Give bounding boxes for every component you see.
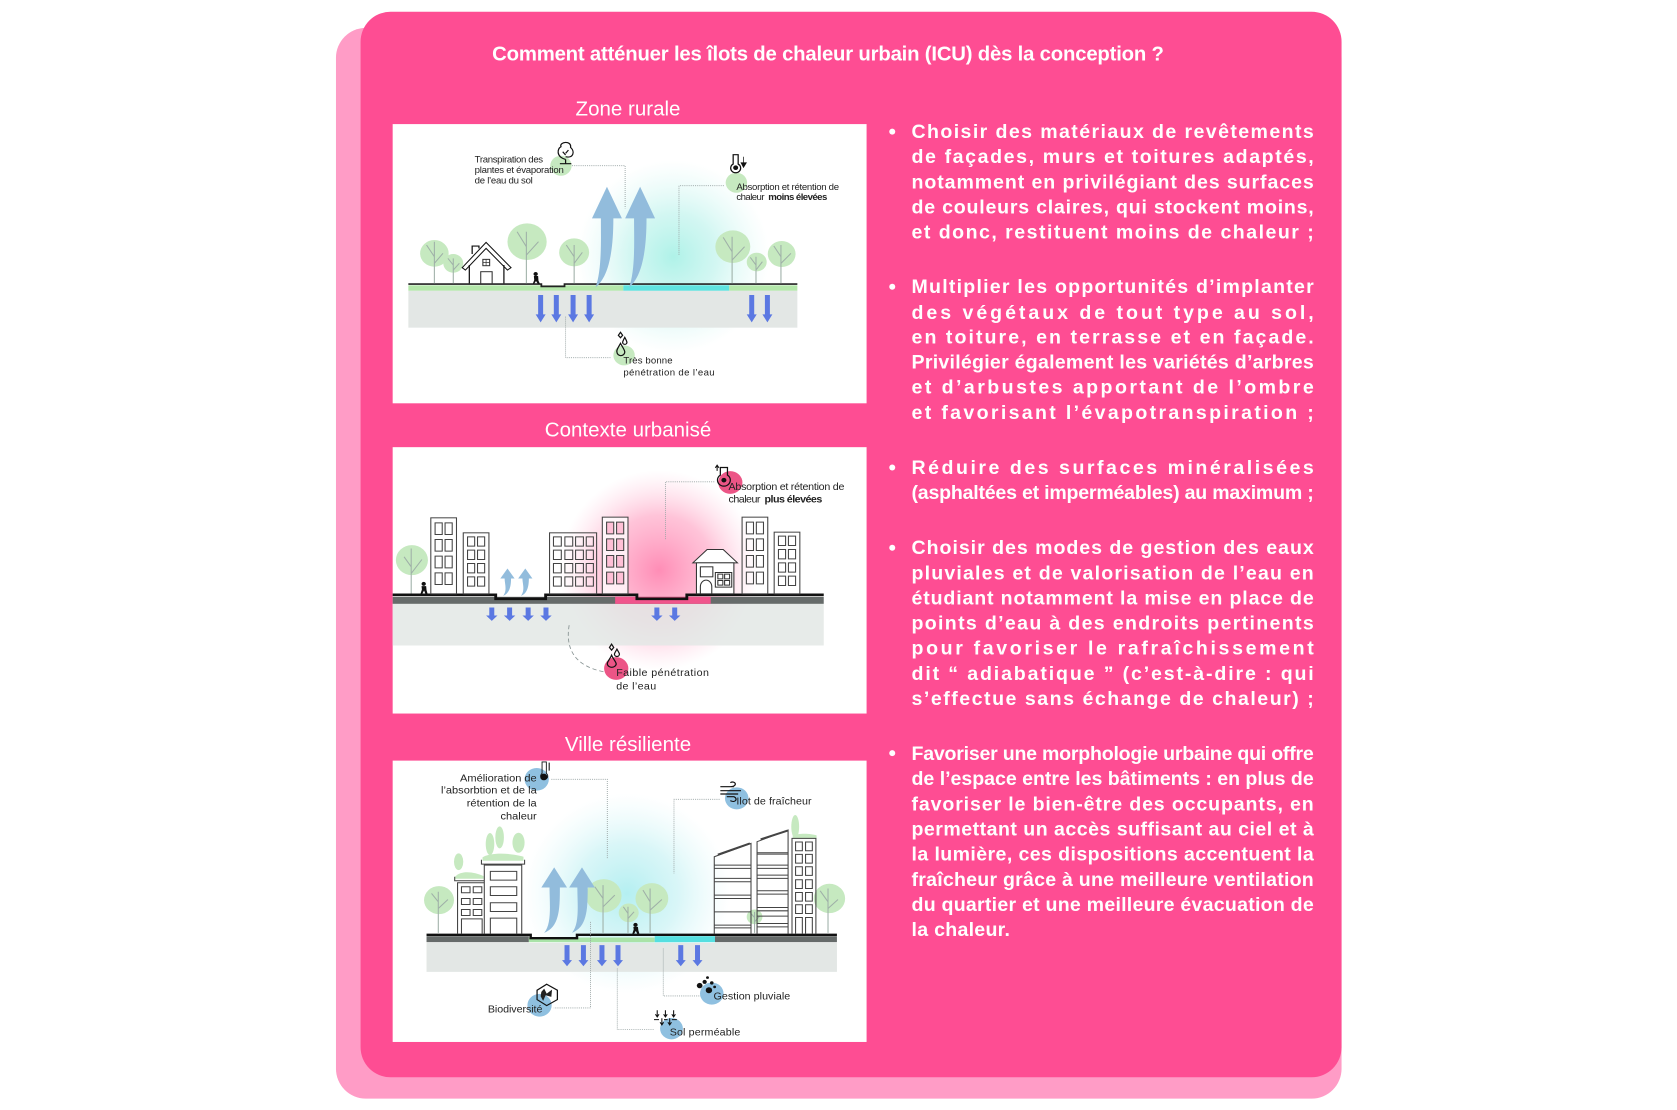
callout: îlot de fraîcheur: Ilot de fraîcheur	[736, 797, 812, 807]
callout: amélioration: chaleur	[501, 811, 537, 822]
title: Comment atténuer les îlots de chaleur urbain (ICU) dès la conception ?	[492, 43, 1164, 65]
buildings left with green roofs	[454, 826, 525, 934]
callout: amélioration: Amélioration de	[460, 773, 537, 784]
callout: gestion pluviale: Gestion pluviale	[714, 992, 790, 1002]
callout: sol perméable	[654, 1010, 741, 1039]
air flow arrows	[592, 187, 655, 287]
callout: gestion pluviale	[697, 976, 790, 1005]
callout: transpiration	[475, 142, 573, 185]
tree and person	[396, 545, 428, 594]
callout: faible pénétration: de l’eau	[616, 682, 656, 692]
house	[462, 242, 511, 284]
panel: zone rurale	[393, 124, 867, 403]
callout: pénétration de l'eau: pénétration de l’eau	[623, 368, 715, 378]
buildings right with solar roofs	[714, 815, 817, 934]
callout: absorption plus élevées: Absorption et rétention de	[729, 482, 845, 493]
bullet 1: de couleurs claires, qui stockent moins,	[912, 196, 1314, 218]
bullet 5: la lumière, ces dispositions accentuent la	[912, 844, 1314, 866]
heat glow: cool	[524, 793, 730, 994]
bullet 1: notamment en privilégiant des surfaces	[912, 171, 1314, 193]
heading: contexte urbanisé: Contexte urbanisé	[545, 418, 711, 441]
bullet 4	[889, 537, 1314, 710]
leader lines	[551, 779, 720, 1030]
callout: transpiration: de l’eau du sol	[475, 176, 533, 185]
callout: amélioration	[441, 762, 549, 822]
callout: pénétration de l'eau: Très bonne	[623, 356, 673, 365]
bullet 2: Privilégier également les variétés d’arbres	[912, 352, 1314, 374]
bullet 4: pluviales et de valorisation de l’eau en	[912, 562, 1314, 584]
person	[632, 923, 639, 934]
ground section	[393, 595, 824, 645]
infiltration arrows	[536, 295, 772, 322]
bullet 5: Favoriser une morphologie urbaine qui offre	[912, 743, 1314, 765]
callout: sol perméable: Sol perméable	[670, 1028, 741, 1038]
bullet 1	[889, 121, 1314, 244]
bullet 4: points d’eau à des endroits pertinents	[912, 613, 1314, 635]
bullet 5: fraîcheur grâce à une meilleure ventilation	[912, 869, 1314, 891]
bullet 5	[889, 743, 1314, 941]
bullet 5: de l’espace entre les bâtiments : en plus de	[912, 768, 1314, 790]
panel: ville résiliente	[393, 761, 867, 1042]
callout: absorption plus élevées: chaleur plus élevées	[729, 495, 823, 505]
trees	[420, 223, 796, 283]
bullet 2: et d’arbustes apportant de l’ombre	[912, 377, 1314, 399]
bullet 2: en toiture, en terrasse et en façade.	[912, 326, 1314, 348]
bullet 3	[889, 457, 1314, 504]
callout: transpiration: Transpiration des	[475, 155, 543, 164]
buildings	[431, 517, 800, 594]
bullet 5: permettant un accès suffisant au ciel et à	[912, 818, 1314, 840]
bullet 1: Choisir des matériaux de revêtements	[912, 121, 1314, 143]
callout: absorption plus élevées	[715, 465, 845, 505]
bullet 5: la chaleur.	[912, 919, 1010, 941]
back panel	[336, 28, 1342, 1099]
trees	[424, 879, 845, 933]
air flow arrows	[541, 867, 595, 933]
heat glow: hot	[559, 470, 759, 670]
bullet 2: Multiplier les opportunités d’implanter	[912, 276, 1314, 298]
leader lines	[568, 482, 714, 672]
callout: îlot de fraîcheur	[720, 782, 812, 809]
heading: zone rurale: Zone rurale	[576, 98, 680, 121]
bullet 2	[889, 276, 1314, 424]
ground section	[408, 284, 797, 328]
callout: amélioration: l’absorbtion et de la	[441, 785, 537, 796]
panel: contexte urbanisé	[393, 447, 867, 714]
ground section	[427, 935, 837, 972]
text block: recommandations	[889, 121, 1314, 941]
callout: faible pénétration: Faible pénétration	[616, 668, 709, 679]
bullet 1: de façades, murs et toitures adaptés,	[912, 146, 1314, 168]
bullet 5: favoriser le bien-être des occupants, en	[912, 793, 1314, 815]
bullet 4: dit “ adiabatique ” (c’est-à-dire : qui	[912, 663, 1314, 685]
air flow arrows	[500, 568, 532, 596]
bullet 4: pour favoriser le rafraîchissement	[912, 638, 1314, 660]
house	[693, 549, 737, 594]
bullet 5: du quartier et une meilleure évacuation de	[912, 894, 1314, 916]
bullet 2: et favorisant l’évapotranspiration ;	[912, 402, 1314, 424]
bullet 4: étudiant notamment la mise en place de	[912, 587, 1314, 609]
callout: absorption moins élevées: chaleur moins élevées	[736, 192, 827, 202]
callout: absorption moins élevées	[726, 155, 839, 202]
bullet 4: Choisir des modes de gestion des eaux	[912, 537, 1314, 559]
bullet 2: des végétaux de tout type au sol,	[912, 302, 1314, 324]
callout: pénétration de l'eau	[613, 332, 715, 378]
infiltration arrows	[562, 945, 703, 966]
person	[533, 272, 540, 284]
callout: biodiversité: Biodiversité	[488, 1005, 543, 1015]
callout: faible pénétration	[604, 644, 709, 692]
heading: ville résiliente: Ville résiliente	[565, 733, 691, 756]
callout: biodiversité	[488, 984, 557, 1017]
bullet 4: s’effectue sans échange de chaleur) ;	[912, 688, 1314, 710]
callout: transpiration: plantes et évaporation	[475, 165, 564, 175]
bullet 3: (asphaltées et imperméables) au maximum ;	[912, 482, 1314, 504]
callout: absorption moins élevées: Absorption et rétention de	[736, 182, 839, 192]
bullet 3: Réduire des surfaces minéralisées	[912, 457, 1314, 479]
infiltration arrows	[486, 607, 680, 621]
callout: amélioration: rétention de la	[467, 798, 537, 809]
main panel	[361, 12, 1342, 1077]
heat glow: cool	[577, 160, 770, 353]
leader lines	[566, 166, 724, 358]
bullet 1: et donc, restituent moins de chaleur ;	[912, 222, 1314, 244]
